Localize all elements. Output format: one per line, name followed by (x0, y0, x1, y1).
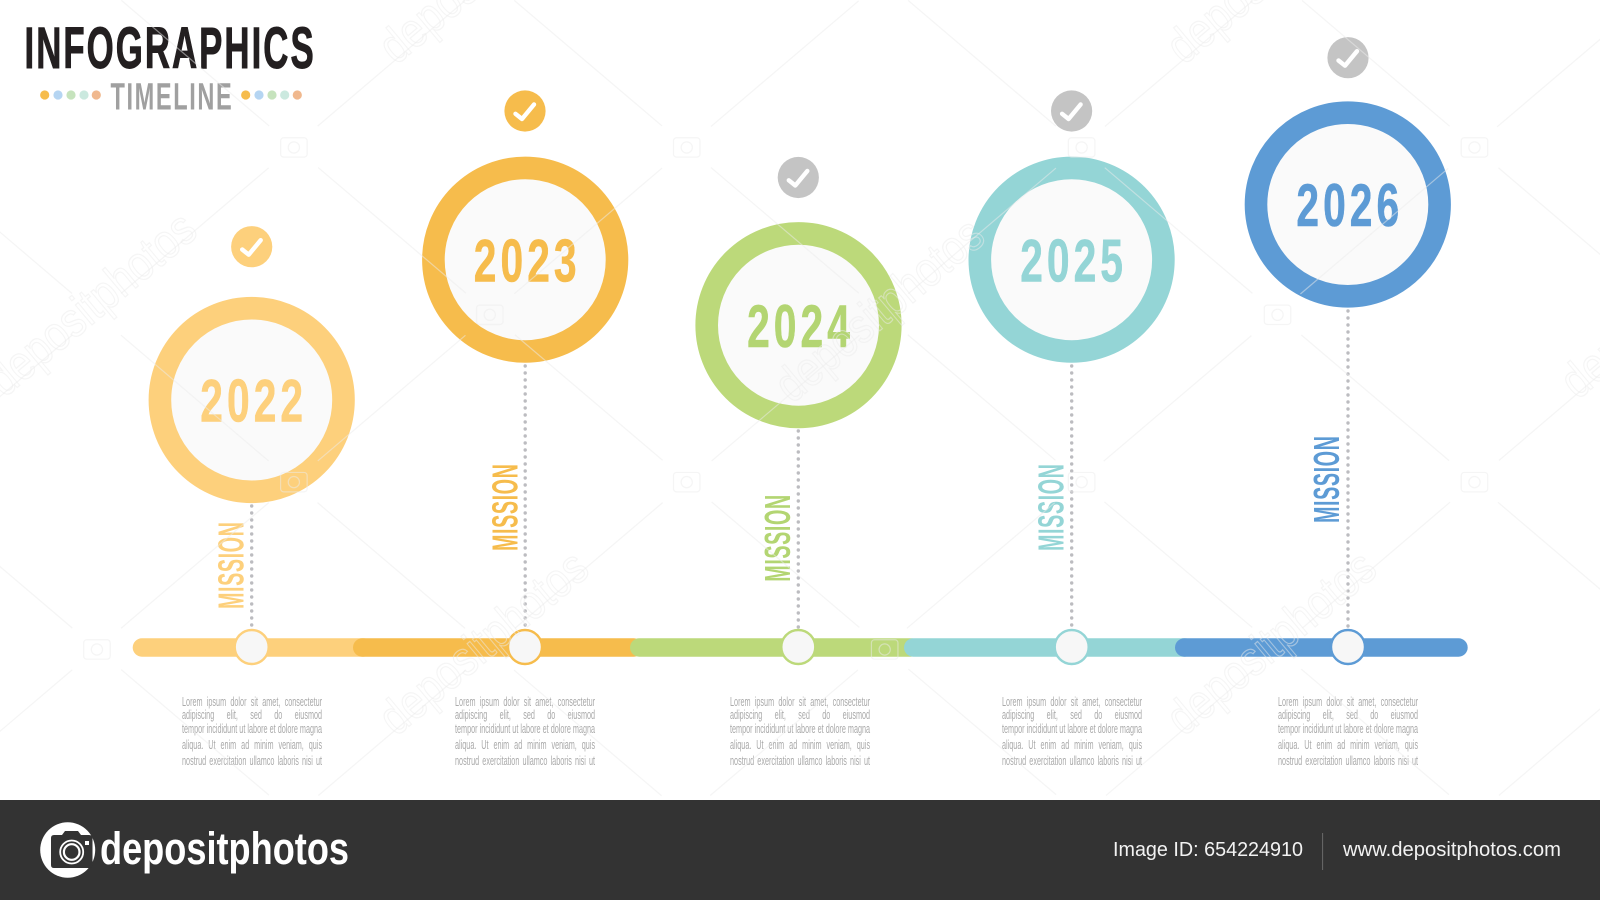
milestone 2022 (160, 226, 344, 664)
icon: camera logo (40, 822, 95, 878)
text block 2023: Lorem ipsum dolor sit amet, consectetur (455, 695, 595, 709)
text block 2023: aliqua. Ut enim ad minim veniam, quis (455, 738, 595, 752)
text block 2025 (1002, 695, 1142, 768)
footer bar (0, 800, 1600, 900)
title: INFOGRAPHICS: INFOGRAPHICS (24, 17, 316, 81)
node 2026 (1331, 630, 1365, 664)
logo wordmark: depositphotos (100, 823, 349, 874)
text block 2025: aliqua. Ut enim ad minim veniam, quis (1002, 738, 1142, 752)
footer divider (1322, 833, 1324, 870)
timeline bar (133, 638, 1468, 657)
text block 2023: adipiscing elit, sed do eiusmod (455, 708, 595, 722)
milestone 2023 (433, 90, 617, 664)
MISSION label 2022: MISSION (212, 522, 252, 609)
year 2025: 2025 (1020, 228, 1127, 294)
watermark pattern: depositphotos (1156, 540, 1386, 746)
text block 2024: tempor incididunt ut labore et dolore magna (730, 722, 870, 736)
watermark pattern: depositphotos (764, 208, 995, 413)
year ring 2023 (433, 168, 617, 352)
text block 2025: nostrud exercitation ullamco laboris nisi ut (1002, 754, 1142, 768)
text block 2022: nostrud exercitation ullamco laboris nisi ut (182, 754, 322, 768)
website url: www.depositphotos.com (1342, 838, 1561, 861)
watermark pattern: depositphotos (369, 540, 599, 746)
text block 2022: aliqua. Ut enim ad minim veniam, quis (182, 738, 322, 752)
year ring 2025 (980, 168, 1163, 352)
text block 2026 (1278, 695, 1418, 768)
text block 2025: tempor incididunt ut labore et dolore magna (1002, 722, 1142, 736)
year 2023: 2023 (474, 228, 581, 294)
text block 2026: Lorem ipsum dolor sit amet, consectetur (1278, 695, 1418, 709)
text block 2022 (182, 695, 322, 768)
text block 2022: tempor incididunt ut labore et dolore magna (182, 722, 322, 736)
year ring 2024 (707, 233, 890, 417)
text block 2024: adipiscing elit, sed do eiusmod (730, 708, 870, 722)
text block 2025: adipiscing elit, sed do eiusmod (1002, 708, 1142, 722)
year ring 2026 (1256, 113, 1440, 296)
node 2024 (781, 630, 815, 664)
text block 2024: nostrud exercitation ullamco laboris nisi ut (730, 754, 870, 768)
node 2025 (1055, 630, 1089, 664)
text block 2026: adipiscing elit, sed do eiusmod (1278, 708, 1418, 722)
milestone 2024 (707, 157, 890, 664)
text block 2022: adipiscing elit, sed do eiusmod (182, 708, 322, 722)
check badge 2024 (778, 157, 819, 198)
check badge 2022 (231, 226, 272, 267)
connector 2025 (1070, 366, 1073, 628)
year 2024: 2024 (747, 293, 854, 360)
text block 2022: Lorem ipsum dolor sit amet, consectetur (182, 695, 322, 709)
text block 2024 (730, 695, 870, 768)
connector 2024 (797, 431, 800, 628)
decorative dots right of subtitle (241, 90, 302, 100)
text block 2023 (455, 695, 595, 768)
check badge 2026 (1327, 37, 1369, 78)
MISSION label 2026: MISSION (1308, 436, 1348, 523)
image id: Image ID: 654224910 (1113, 838, 1303, 861)
check badge 2025 (1051, 90, 1092, 132)
text block 2026: nostrud exercitation ullamco laboris nisi ut (1278, 754, 1418, 768)
MISSION label 2025: MISSION (1032, 464, 1072, 551)
milestone 2026 (1256, 37, 1440, 664)
year 2022: 2022 (200, 368, 307, 435)
node 2022 (235, 630, 269, 664)
connector 2026 (1346, 311, 1350, 628)
decorative dots left of subtitle (40, 90, 101, 100)
MISSION label 2024: MISSION (759, 494, 799, 582)
text block 2026: aliqua. Ut enim ad minim veniam, quis (1278, 738, 1418, 752)
MISSION label 2023: MISSION (486, 464, 526, 551)
text block 2023: tempor incididunt ut labore et dolore magna (455, 722, 595, 736)
check badge 2023 (504, 90, 546, 132)
node 2023 (508, 630, 542, 664)
text block 2026: tempor incididunt ut labore et dolore magna (1278, 722, 1418, 736)
text block 2023: nostrud exercitation ullamco laboris nisi ut (455, 754, 595, 768)
milestone 2025 (980, 90, 1163, 664)
year ring 2022 (160, 308, 344, 492)
text block 2024: aliqua. Ut enim ad minim veniam, quis (730, 738, 870, 752)
connector 2022 (250, 506, 253, 628)
year 2026: 2026 (1296, 172, 1403, 239)
subtitle: TIMELINE: TIMELINE (110, 74, 233, 118)
text block 2025: Lorem ipsum dolor sit amet, consectetur (1002, 695, 1142, 709)
text block 2024: Lorem ipsum dolor sit amet, consectetur (730, 695, 870, 709)
connector 2023 (524, 366, 527, 628)
